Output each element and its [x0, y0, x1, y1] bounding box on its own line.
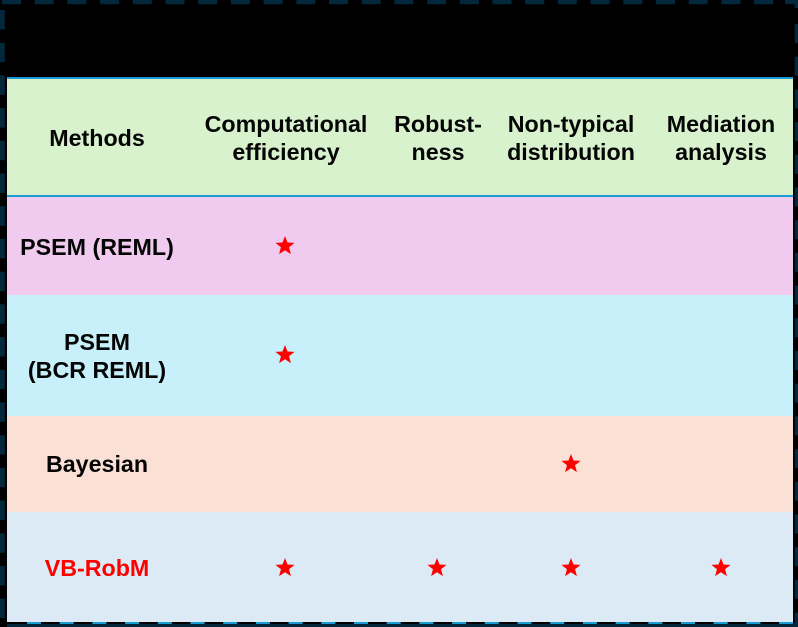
header: Mediation analysis: Mediation [667, 110, 775, 136]
header: Robustness: ness [412, 138, 464, 164]
method label [28, 329, 166, 383]
header: Computational efficiency: Computational [205, 110, 367, 136]
star: mediation analysis [712, 558, 730, 576]
header: Mediation analysis [667, 110, 775, 165]
header: Non-typical distribution [507, 110, 635, 164]
header: Methods: Methods [49, 124, 145, 150]
star: non-typical distribution [562, 454, 580, 472]
header: Non-typical distribution: distribution [507, 138, 635, 164]
method label: VB-RobM [45, 555, 149, 581]
star: non-typical distribution [562, 558, 580, 576]
star: computational efficiency [276, 558, 294, 576]
star: computational efficiency [276, 345, 294, 364]
row: VB-RobM [7, 512, 793, 622]
star: computational efficiency [276, 236, 294, 254]
header: Mediation analysis: analysis [675, 138, 767, 164]
row: Bayesian [7, 416, 793, 512]
method label: PSEM (REML) [20, 234, 174, 260]
method label: PSEM [64, 329, 130, 355]
row: PSEM (BCR REML) [7, 295, 793, 416]
method label: Bayesian [46, 451, 148, 477]
header: Computational efficiency [205, 110, 367, 165]
header: Computational efficiency: efficiency [232, 138, 340, 164]
star: robustness [428, 558, 446, 576]
row: PSEM (REML) [7, 197, 793, 295]
header: Non-typical distribution: Non-typical [508, 110, 634, 136]
header: Robustness: Robust- [394, 110, 482, 136]
header: Robustness [394, 110, 482, 164]
header row [7, 77, 793, 197]
method label: (BCR REML) [28, 357, 166, 383]
